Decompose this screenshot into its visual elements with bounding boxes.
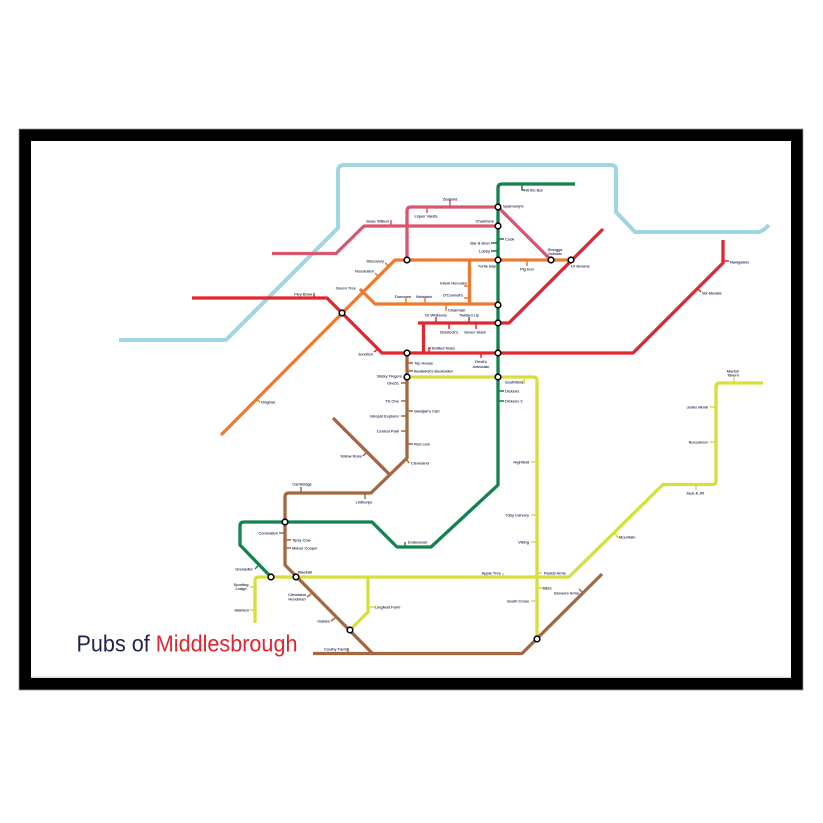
station labels: Hit the Bar bbox=[524, 188, 544, 192]
station labels: Liquor Vaults bbox=[414, 214, 438, 218]
station labels: Top House bbox=[414, 360, 434, 366]
line: red bbox=[192, 229, 729, 358]
station labels: Sherlock's bbox=[440, 330, 458, 334]
station labels: Dr Browns bbox=[571, 264, 590, 268]
station labels: Southfield bbox=[505, 380, 523, 384]
station labels: Buccaneer bbox=[689, 440, 709, 444]
station labels: Coronation bbox=[258, 530, 278, 536]
station labels: Sporting bbox=[234, 582, 248, 587]
station labels: Linthorpe bbox=[356, 500, 373, 504]
station labels: Lodge bbox=[235, 586, 247, 591]
station labels: Advocate bbox=[473, 364, 490, 369]
picture frame bbox=[19, 129, 803, 690]
station labels: Blackall bbox=[298, 570, 312, 574]
station labels: Intrepid Explorer bbox=[370, 414, 400, 418]
station labels: Isaac Wilson bbox=[366, 218, 389, 224]
station labels: Zealand bbox=[443, 196, 457, 202]
station labels: Manor Cooper bbox=[292, 546, 318, 550]
station labels: Cambridge bbox=[292, 482, 313, 486]
station labels: Discovery bbox=[366, 258, 384, 264]
station labels: Swatjan's Carr bbox=[414, 408, 441, 414]
station labels: Infant Hercules bbox=[440, 280, 467, 286]
station labels: Nutsatch bbox=[416, 294, 432, 299]
station labels bbox=[234, 188, 749, 652]
station labels: Navigation bbox=[730, 260, 749, 264]
station labels: Jonks Monk bbox=[687, 404, 708, 410]
station labels: Twisted Lip bbox=[459, 312, 480, 318]
station labels: South Cross bbox=[507, 598, 529, 604]
station labels: O'Connell's bbox=[443, 292, 463, 298]
station labels: Central Park bbox=[377, 428, 399, 434]
station labels: Rudds Arms bbox=[544, 570, 566, 576]
station labels: Chambers bbox=[476, 218, 494, 224]
station labels: Cleveland bbox=[288, 592, 306, 597]
line: green bbox=[240, 184, 575, 577]
station labels: Green Tree bbox=[336, 286, 357, 290]
station labels: Yellow Rose bbox=[340, 454, 363, 458]
station labels: Bar & Beer bbox=[470, 240, 491, 246]
station labels: TS One bbox=[385, 398, 400, 404]
station labels: Pig Iron bbox=[520, 266, 534, 272]
station labels: Resolution bbox=[355, 268, 374, 274]
station labels: Viking bbox=[518, 540, 529, 544]
station labels: Turtle Bay bbox=[478, 264, 496, 268]
station labels: Smuggs bbox=[548, 247, 562, 252]
line: pink bbox=[272, 200, 551, 260]
title: Pubs of Middlesbrough bbox=[76, 630, 298, 656]
station labels: Stainton bbox=[234, 608, 249, 612]
station labels: Donovan bbox=[395, 294, 411, 299]
station labels: Ikeatwick's Bookseller bbox=[414, 368, 454, 374]
station labels: Marton bbox=[727, 368, 739, 374]
line: orange bbox=[221, 260, 571, 435]
line: brown bbox=[279, 353, 602, 654]
station labels: Scholar bbox=[548, 251, 562, 256]
station labels: Jack & Jill bbox=[686, 490, 704, 496]
station labels: Highfield bbox=[513, 460, 529, 464]
station labels: Mountain bbox=[619, 534, 635, 540]
station labels: Tipsy Cow bbox=[292, 538, 311, 542]
station labels: Chairman bbox=[448, 308, 465, 312]
station labels: Lingfield Farm bbox=[375, 604, 401, 610]
station labels: Lobby bbox=[479, 248, 490, 254]
station labels: Endeavour bbox=[408, 540, 428, 544]
station labels: One51 bbox=[387, 380, 400, 386]
station labels: Bottled Nose bbox=[432, 346, 456, 350]
station labels: Hundman bbox=[288, 596, 306, 602]
station labels: Toby Carvery bbox=[505, 512, 529, 518]
station labels: Dickens 2 bbox=[505, 398, 523, 404]
station labels: Fley Brow bbox=[294, 292, 312, 296]
station labels: Dr Whitsons bbox=[425, 312, 447, 318]
line: lime bbox=[250, 377, 763, 639]
station labels: Original bbox=[261, 400, 275, 404]
station labels: Bliss bbox=[543, 586, 551, 590]
station labels: Six Medals bbox=[702, 290, 722, 296]
station labels: Apple Tree bbox=[482, 570, 502, 576]
station labels: Tavern bbox=[727, 372, 739, 378]
station labels: Sticky Fingers bbox=[377, 374, 402, 378]
line: light blue bbox=[119, 165, 769, 340]
interchange stations bbox=[268, 204, 574, 642]
station labels: Dickens bbox=[505, 388, 519, 394]
station labels: Red Lion bbox=[414, 442, 430, 446]
station labels: Coulby Farm bbox=[324, 646, 348, 652]
station labels: Brewers Arms bbox=[554, 590, 579, 596]
station labels: Sparrowly's bbox=[503, 204, 524, 208]
station labels: Cleveland bbox=[411, 460, 429, 466]
station labels: Devil's bbox=[475, 359, 487, 364]
station labels: Seven Stars bbox=[464, 330, 486, 334]
station labels: Junction bbox=[358, 352, 373, 356]
station labels: Cook bbox=[505, 236, 514, 242]
station labels: Grenadier bbox=[235, 566, 254, 572]
station labels: Gables bbox=[317, 618, 330, 624]
